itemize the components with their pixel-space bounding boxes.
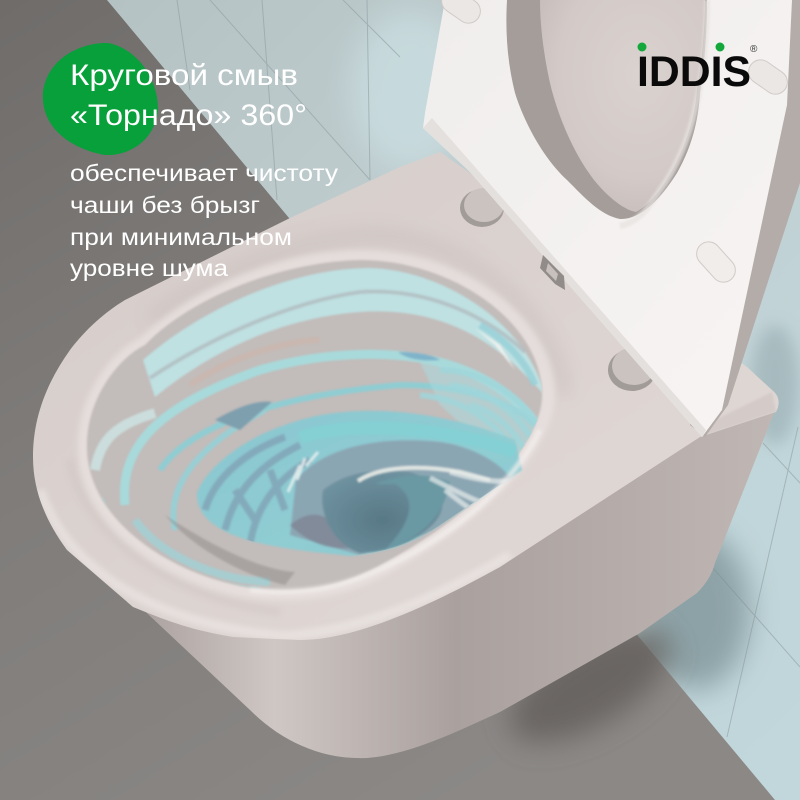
bowl with swirl [78,250,555,601]
body side face [133,405,777,758]
heading [70,59,307,132]
description text [70,160,339,281]
description text: уровне шума [70,255,228,281]
foam streaks [288,452,318,492]
top deck [33,152,779,640]
toilet body [33,152,779,758]
upper water band [143,268,545,397]
seat pads [437,0,485,28]
logo blob [43,43,158,155]
brand logo: IDDIS [637,48,751,96]
description text: обеспечивает чистоту [70,160,339,186]
description text: чаши без брызг [70,192,260,218]
hinge discs [460,188,656,391]
heading: Круговой смыв [70,59,298,92]
brand logo: ® [750,44,758,55]
right streaks [421,363,534,454]
seat opening [506,0,707,219]
aqua swirl bands [124,354,537,505]
lower left gray shelf [165,515,295,585]
heading: «Торнадо» 360° [70,99,307,132]
center hinge bracket [540,255,565,290]
description text: при минимальном [70,224,292,250]
toilet seat lid [423,0,800,437]
bright front lip of the bowl [250,430,540,592]
rim shading [40,235,776,636]
central water pool [197,411,522,556]
